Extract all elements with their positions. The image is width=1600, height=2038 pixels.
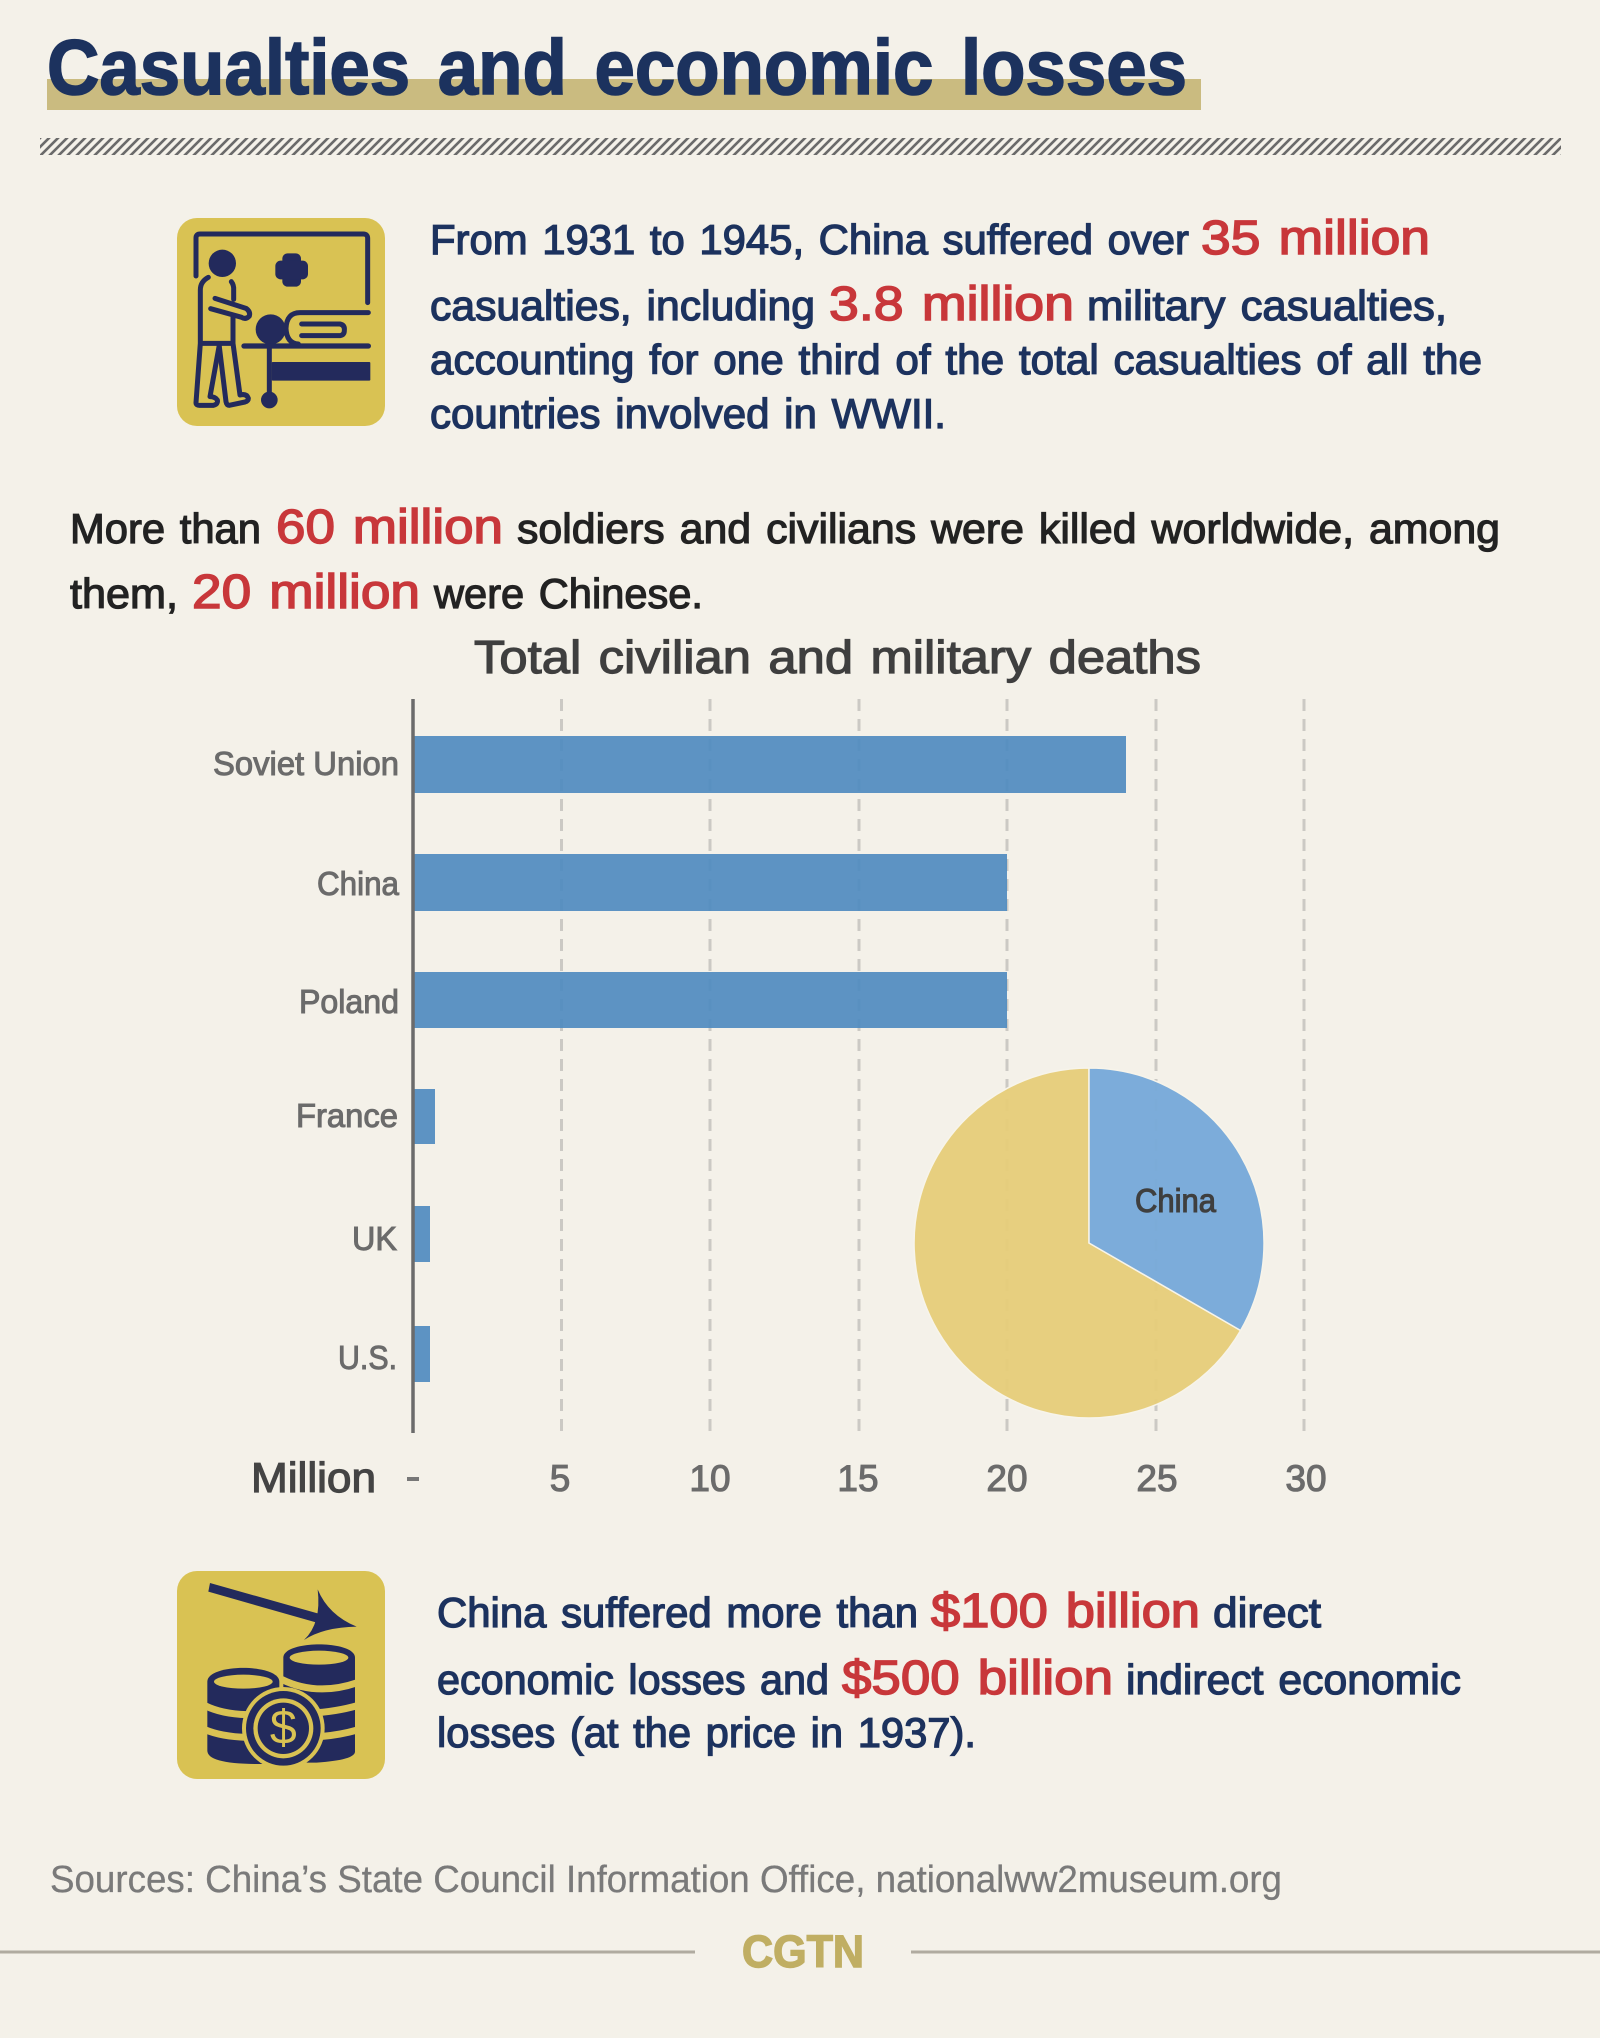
text block: economic losses: economic losses and: [437, 1656, 829, 1703]
bar chart: total civilian and military deaths: 10: [689, 1458, 731, 1499]
title: Casualties and economic losses: [47, 23, 1187, 111]
text block: worldwide deaths: 20 million: [192, 566, 420, 619]
pie chart: China share: [914, 1068, 1264, 1418]
text block: worldwide deaths: were Chinese.: [433, 570, 703, 617]
bar chart: total civilian and military deaths: 15: [837, 1458, 879, 1499]
bar chart: total civilian and military deaths: Million: [251, 1454, 376, 1501]
bar chart: total civilian and military deaths: Poland: [299, 983, 399, 1020]
text block: economic losses: [437, 1585, 1461, 1756]
bar chart: total civilian and military deaths: UK: [352, 1220, 397, 1257]
bar chart: total civilian and military deaths: Soviet Union: [213, 745, 399, 782]
bar chart: total civilian and military deaths: 30: [1285, 1458, 1327, 1499]
chart title: Total civilian and military deaths: [474, 631, 1201, 683]
text block: worldwide deaths: More than: [70, 505, 261, 552]
text block: casualties: military casualties,: [1087, 282, 1447, 329]
text block: casualties: 3.8 million: [829, 278, 1074, 331]
text block: economic losses: direct: [1213, 1589, 1321, 1636]
text block: worldwide deaths: 60 million: [276, 501, 503, 554]
icon: coins and falling arrow: [177, 1571, 385, 1779]
text block: worldwide deaths: them,: [70, 570, 178, 617]
text block: economic losses: indirect economic: [1126, 1656, 1461, 1703]
bar chart: total civilian and military deaths: China: [317, 865, 400, 902]
text block: casualties: accounting for one third of the total casualties of all the: [430, 336, 1482, 383]
bar chart: total civilian and military deaths: 5: [550, 1458, 570, 1499]
icon: medical care: [177, 218, 385, 426]
pie chart: China share: China: [1135, 1182, 1217, 1219]
text block: worldwide deaths: [70, 501, 1500, 619]
text block: casualties: [430, 212, 1482, 437]
sources: Sources: China’s State Council Information Office, nationalww2museum.org: [50, 1859, 1282, 1901]
text block: casualties: countries involved in WWII.: [430, 390, 946, 437]
footer logo: CGTN: CGTN: [742, 1926, 864, 1977]
text block: economic losses: losses (at the price in 1937).: [437, 1709, 976, 1756]
text block: casualties: 35 million: [1201, 212, 1430, 265]
text block: worldwide deaths: soldiers and civilians were killed worldwide, among: [517, 505, 1500, 552]
text block: economic losses: $500 billion: [842, 1652, 1113, 1705]
icon: coins and falling arrow: $: [270, 1701, 297, 1755]
text block: casualties: casualties, including: [430, 282, 815, 329]
text block: economic losses: $100 billion: [931, 1585, 1200, 1638]
bar chart: total civilian and military deaths: 20: [986, 1458, 1028, 1499]
bar chart: total civilian and military deaths: U.S.: [338, 1339, 397, 1376]
bar chart: total civilian and military deaths: France: [296, 1097, 398, 1134]
bar chart: total civilian and military deaths: [213, 699, 1327, 1501]
text block: economic losses: China suffered more than: [437, 1589, 918, 1636]
text block: casualties: From 1931 to 1945, China suffered over: [430, 216, 1189, 263]
bar chart: total civilian and military deaths: 25: [1136, 1458, 1178, 1499]
